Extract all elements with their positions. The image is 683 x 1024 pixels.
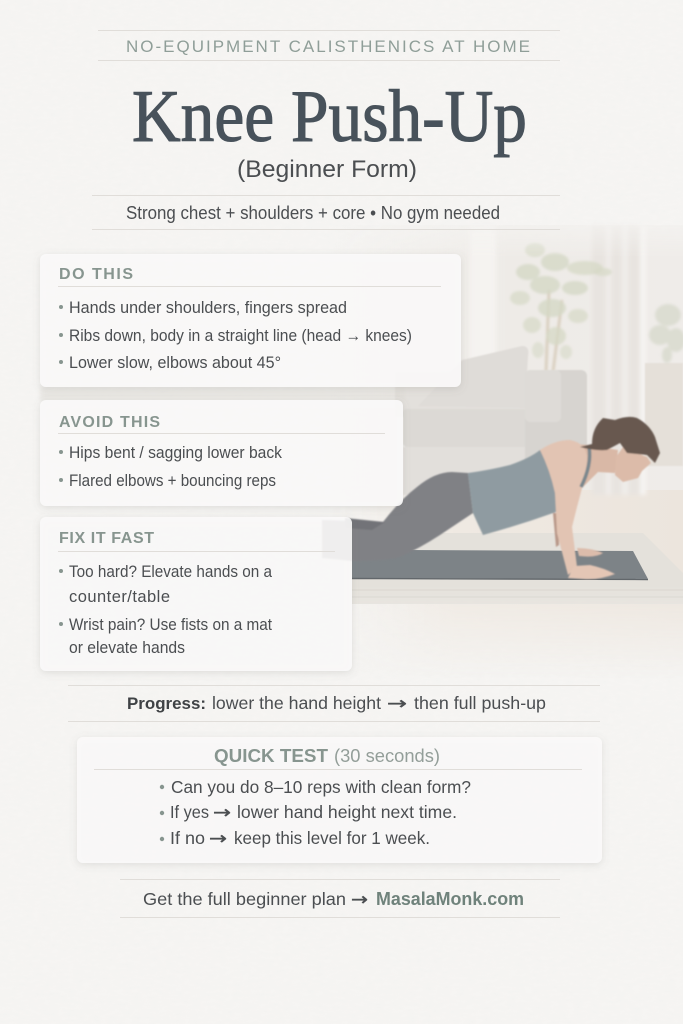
eyebrow heading xyxy=(98,30,560,60)
heading: quick test: (30 seconds) xyxy=(334,746,440,766)
footer call to action xyxy=(120,880,560,918)
shoulder and near arm xyxy=(540,440,587,575)
panel: do this xyxy=(40,254,461,387)
curtains xyxy=(477,251,646,495)
progress line: Progress: xyxy=(127,694,206,713)
eyebrow heading: NO-EQUIPMENT CALISTHENICS AT HOME xyxy=(126,37,530,56)
shade behind cards xyxy=(40,386,405,402)
sofa xyxy=(395,346,587,495)
list: do this xyxy=(59,299,412,372)
leggings xyxy=(322,472,473,561)
tagline xyxy=(92,196,560,230)
footer call to action: MasalaMonk.com xyxy=(376,889,524,909)
heading: quick test xyxy=(214,746,440,766)
heading: quick test: QUICK TEST xyxy=(214,746,328,766)
list: avoid this: Hips bent / sagging lower back xyxy=(69,444,283,462)
top strap xyxy=(581,447,590,487)
tagline: Strong chest + shoulders + core • No gym needed xyxy=(126,203,500,223)
list: quick test xyxy=(160,777,471,849)
list: avoid this xyxy=(59,444,283,490)
progress line: then full push-up xyxy=(414,693,546,713)
panel: avoid this xyxy=(40,400,403,506)
side cabinet with small plant xyxy=(645,304,683,466)
panel: quick test xyxy=(77,737,602,863)
subtitle: (Beginner Form) xyxy=(237,156,417,183)
near hand xyxy=(568,565,615,579)
list: do this: Ribs down, body in a straight line (head → knees) xyxy=(69,327,412,345)
list: avoid this: Flared elbows + bouncing reps xyxy=(69,472,276,490)
list: quick test: If no xyxy=(170,828,205,848)
list: quick test: Can you do 8–10 reps with clean form? xyxy=(171,777,471,797)
title: Knee Push-Up xyxy=(132,76,527,158)
heading: avoid this: AVOID THIS xyxy=(59,414,160,431)
woman xyxy=(322,417,660,579)
heading: fix it fast: FIX IT FAST xyxy=(59,530,154,547)
neck and chest xyxy=(581,444,618,487)
footer call to action: → xyxy=(351,890,368,910)
list: fix it fast: Wrist pain? Use fists on a mat xyxy=(69,616,272,634)
progress line: → xyxy=(387,694,407,714)
panel: fix it fast xyxy=(40,517,352,671)
list: do this: Hands under shoulders, fingers spread xyxy=(69,299,347,317)
far arm and hand xyxy=(553,513,559,547)
list: fix it fast xyxy=(59,563,273,657)
heading: do this: DO THIS xyxy=(59,266,133,283)
list: quick test: → xyxy=(209,829,227,849)
list: quick test: keep this level for 1 week. xyxy=(234,828,430,848)
living room photo with woman doing a knee push-up xyxy=(322,225,683,680)
list: fix it fast: Too hard? Elevate hands on a xyxy=(69,563,273,581)
list: fix it fast: or elevate hands xyxy=(69,639,185,657)
list: fix it fast: counter/table xyxy=(69,588,170,606)
rug xyxy=(352,533,683,604)
list: quick test: If yes xyxy=(170,802,209,822)
progress line xyxy=(68,686,600,722)
list: do this: Lower slow, elbows about 45° xyxy=(69,354,281,372)
hair and ponytail xyxy=(580,417,660,463)
list: quick test: → xyxy=(213,803,231,823)
room backdrop xyxy=(408,241,683,646)
list: quick test: lower hand height next time. xyxy=(237,802,457,822)
progress line: lower the hand height xyxy=(212,693,381,713)
tank top xyxy=(468,450,556,535)
footer call to action: Get the full beginner plan xyxy=(143,889,346,909)
yoga mat xyxy=(352,550,648,580)
potted plant xyxy=(510,243,612,372)
face xyxy=(615,447,651,482)
